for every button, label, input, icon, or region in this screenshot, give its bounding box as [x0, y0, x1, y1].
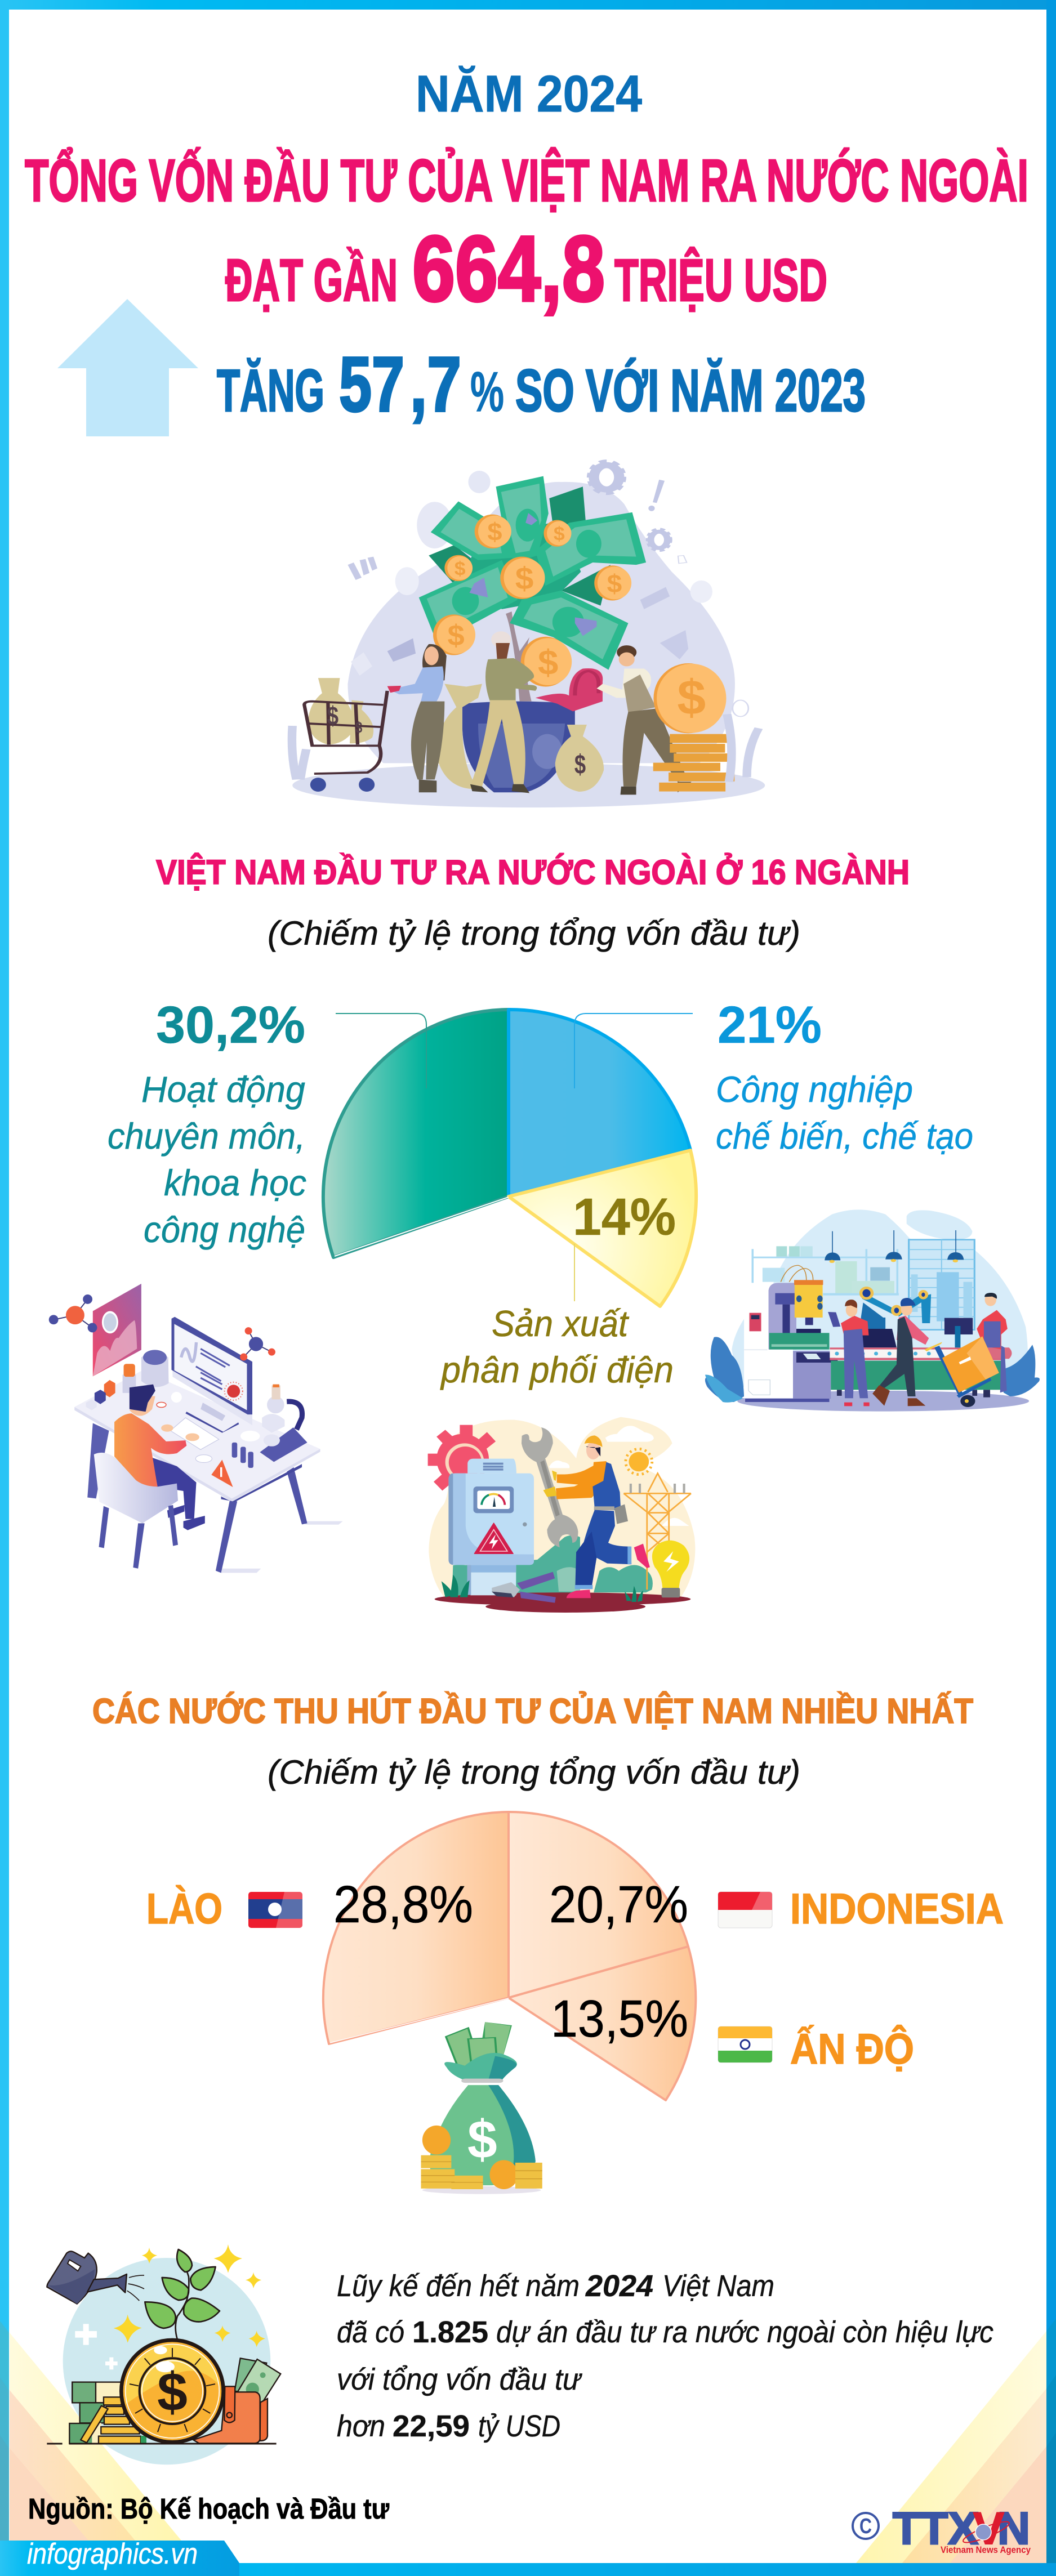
summary text: Lũy kế đến hết năm [337, 2269, 580, 2303]
slice: professional activities 30.2% [323, 1010, 509, 1257]
illustration: factory workers [705, 1209, 1040, 1412]
title [25, 65, 1028, 320]
summary text: dự án đầu tư ra nước ngoài còn hiệu lực [496, 2315, 993, 2349]
label: 21% manufacturing: Công nghiệp [716, 1069, 913, 1110]
illustration: coin plant and wallet [47, 2244, 280, 2465]
growth line: 57 [339, 341, 404, 428]
title line: year: NĂM 2024 [416, 65, 642, 123]
slice: electricity 14% [509, 1150, 696, 1306]
slice: Indonesia 20.7% [509, 1812, 688, 1998]
label: 21% manufacturing: chế biến, chế tạo [716, 1115, 973, 1157]
pie chart: countries [323, 1812, 696, 2100]
label: 30.2% professional activities [108, 995, 306, 1250]
title line: amount: TRIỆU USD [614, 247, 827, 314]
title line: amount [225, 217, 827, 320]
pie chart: sectors [323, 1010, 696, 1306]
section heading: 16 sectors: VIỆT NAM ĐẦU TƯ RA NƯỚC NGOÀI Ở 16 NGÀNH [156, 853, 910, 891]
label: 30.2% professional activities: 30,2% [156, 995, 305, 1054]
label: 14% electricity: Sản xuất [492, 1303, 630, 1344]
summary text: tỷ USD [478, 2409, 560, 2443]
summary text: 2024 [585, 2269, 653, 2303]
title line: amount: 664,8 [412, 217, 605, 320]
summary text: với tổng vốn đầu tư [337, 2363, 583, 2396]
illustration: money tree with people [292, 461, 765, 807]
leader line: 21% [574, 1014, 693, 1088]
illustration: money tree with people: $ [355, 719, 362, 736]
value: Indonesia: 20,7% [549, 1875, 688, 1934]
label: 21% manufacturing [716, 995, 973, 1157]
section heading: top destinations: CÁC NƯỚC THU HÚT ĐẦU TƯ CỦA VIỆT NAM NHIỀU NHẤT [92, 1692, 973, 1731]
illustration: electrician [428, 1417, 695, 1613]
label: 14% electricity [440, 1187, 676, 1390]
value: Laos: 28,8% [333, 1875, 473, 1934]
label: 30.2% professional activities: chuyên môn, [108, 1115, 305, 1157]
logo: TTXVN [853, 2503, 1031, 2555]
title line: amount: ĐẠT GẦN [225, 247, 398, 314]
logo: TTXVN: TTX [893, 2503, 978, 2554]
corner light beams bottom left [10, 2333, 181, 2541]
label: 21% manufacturing: 21% [718, 995, 822, 1054]
growth line: SO VỚI NĂM 2023 [515, 358, 866, 424]
label: 14% electricity: phân phối điện [440, 1349, 674, 1390]
label: 30.2% professional activities: khoa học [164, 1162, 306, 1203]
illustration: money tree with people: $ [607, 569, 622, 598]
illustration: money tree with people: $ [574, 749, 586, 779]
illustration: scientist at computer [49, 1284, 343, 1573]
logo: TTXVN: Vietnam News Agency [941, 2544, 1031, 2555]
icon: money bag [421, 2022, 542, 2194]
label: 30.2% professional activities: công nghệ [144, 1209, 305, 1250]
tab: infographics.vn: infographics.vn [27, 2538, 198, 2570]
flag: Laos [248, 1892, 302, 1928]
illustration: money tree with people: $ [554, 523, 565, 544]
illustration: money tree with people: $ [487, 517, 502, 546]
illustration: money tree with people: $ [677, 669, 706, 725]
corner light beams bottom right [856, 2331, 1046, 2563]
summary text: đã có [337, 2315, 404, 2349]
illustration: money tree with people: $ [455, 558, 466, 579]
flag: Indonesia [718, 1892, 772, 1928]
logo: TTXVN: V [973, 2503, 1004, 2554]
source: Nguồn: Bộ Kế hoạch và Đầu tư [28, 2493, 389, 2525]
slice: Laos 28.8% [323, 1812, 509, 2044]
summary text: Việt Nam [662, 2269, 774, 2303]
icon: up arrow [57, 299, 198, 436]
illustration: coin plant and wallet: $ [157, 2363, 188, 2423]
growth line: ,7 [410, 341, 461, 428]
illustration: money tree with people: $ [515, 561, 533, 596]
illustration: money tree with people: $ [538, 642, 558, 682]
growth line [217, 341, 866, 428]
flag: India [718, 2026, 772, 2062]
section subtitle: (Chiếm tỷ lệ trong tổng vốn đầu tư) [268, 1753, 800, 1791]
logo: TTXVN: N [997, 2503, 1030, 2554]
label: 30.2% professional activities: Hoạt động [141, 1069, 305, 1110]
illustration: money tree with people: $ [448, 619, 465, 652]
section subtitle: (Chiếm tỷ lệ trong tổng vốn đầu tư) [268, 914, 800, 952]
value: India: 13,5% [551, 1989, 688, 2048]
leader line: 14% [574, 1244, 575, 1301]
growth line: TĂNG [217, 358, 324, 424]
slice: manufacturing 21% [509, 1010, 690, 1197]
growth line: % [470, 360, 504, 423]
summary text: 1.825 [412, 2315, 488, 2349]
summary text: 22,59 [393, 2409, 470, 2443]
country label: Indonesia: INDONESIA [790, 1885, 1004, 1933]
slice: India 13.5% [509, 1946, 696, 2100]
logo: TTXVN: C [859, 2515, 872, 2538]
country label: India: ẤN ĐỘ [790, 2025, 914, 2073]
label: 14% electricity: 14% [573, 1187, 676, 1246]
icon: money bag: $ [467, 2110, 497, 2169]
leader line: 30.2% [336, 1014, 426, 1088]
country label: Laos: LÀO [146, 1885, 222, 1933]
summary text [337, 2269, 993, 2443]
illustration: money tree with people: $ [327, 701, 338, 730]
summary text: hơn [337, 2409, 385, 2443]
